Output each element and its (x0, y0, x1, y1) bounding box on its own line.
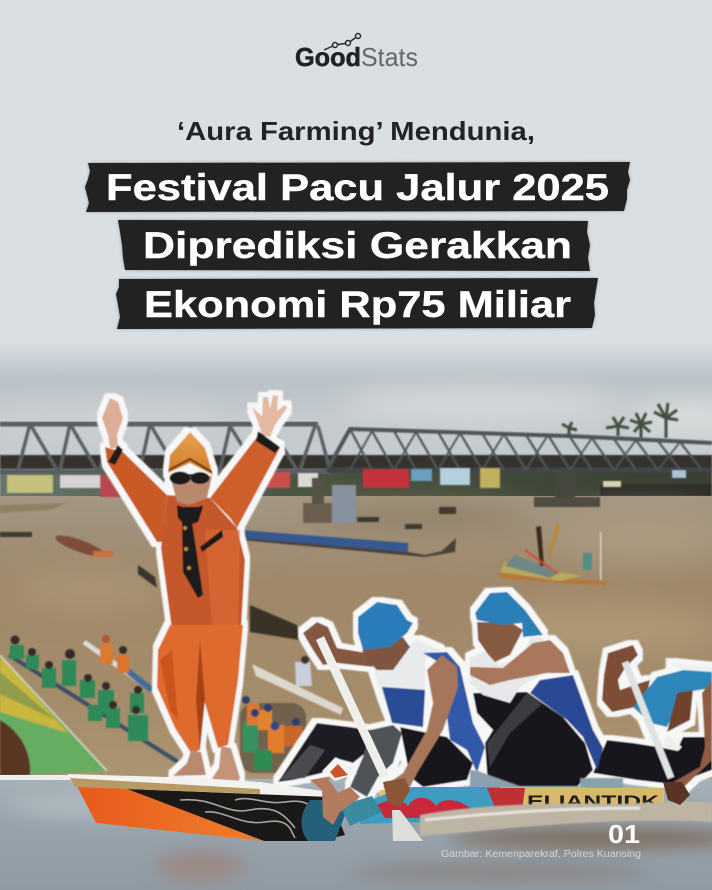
crowd on the bridge deck (0, 455, 712, 469)
feet (173, 750, 206, 776)
sticker gap with orange inset (322, 757, 357, 781)
swimmers and canoe crowd mid river (54, 531, 157, 588)
sleeve cuffs (108, 445, 123, 465)
rower foot over the hull (310, 777, 360, 825)
title line 1 (85, 162, 630, 212)
logo chart line (324, 34, 360, 50)
deck (68, 774, 330, 798)
dancing boy figure (102, 395, 287, 783)
ornate decorated boat (498, 523, 607, 586)
river colour patches (10, 505, 712, 655)
third rower hand (663, 782, 690, 805)
bridge (0, 424, 712, 472)
orange prow (76, 784, 264, 841)
canoe hull (9, 655, 178, 762)
shirt sleeves (105, 447, 167, 542)
rowers group (278, 592, 712, 797)
title line 1: Festival Pacu Jalur 2025 (106, 167, 609, 208)
logo wordmark: Good (295, 42, 361, 72)
page number: 01 (608, 819, 640, 849)
white boat with paddler (252, 656, 343, 715)
bridge piers (303, 470, 600, 523)
second rower (470, 592, 603, 787)
title line 3: Ekonomi Rp75 Miliar (144, 284, 571, 325)
sand bar (0, 503, 67, 513)
shirt placket and pocket (177, 507, 203, 598)
background sky (0, 0, 712, 500)
front paddle (320, 638, 423, 841)
logo: Stats (361, 42, 418, 72)
first rower (278, 602, 485, 797)
clouds (0, 390, 712, 434)
subtitle: ‘Aura Farming’ Mendunia, (177, 116, 535, 146)
foreground green boat bow (0, 655, 107, 776)
title line 3 (116, 278, 598, 329)
officials in orange (100, 644, 113, 664)
left truss (0, 424, 330, 472)
trousers (157, 625, 243, 753)
river (0, 496, 712, 796)
crew in orange and green (240, 696, 306, 773)
painted side panel (360, 787, 664, 824)
sunglasses (170, 472, 210, 484)
shirt buttons (183, 526, 191, 570)
water colour patches (10, 791, 712, 882)
long boat with blue rowers (241, 530, 456, 557)
right truss (327, 429, 712, 470)
palm trees (562, 403, 678, 438)
third rower (593, 645, 712, 788)
banners on the bank (7, 468, 686, 497)
far bank with trees (0, 470, 712, 497)
title line 2: Diprediksi Gerakkan (143, 225, 572, 266)
water in the foreground (0, 775, 712, 890)
crowd behind dancer (250, 605, 300, 640)
logo (295, 34, 418, 72)
title line 2 (118, 220, 590, 271)
hands (102, 398, 123, 448)
painted boat name: ELIANTIDK (527, 792, 660, 811)
small boats on the river (0, 507, 456, 537)
splash along the hull (420, 801, 712, 836)
gold trim (70, 778, 260, 794)
long boat hull (68, 757, 664, 841)
green crew boat on the left (9, 635, 178, 762)
collar (177, 505, 203, 525)
face (170, 476, 212, 505)
front rower hand (383, 778, 410, 807)
shirt body (161, 495, 245, 630)
hat (168, 432, 213, 475)
black carved hull (127, 789, 345, 841)
paddlers in green (10, 645, 148, 741)
boat deck behind rowers (470, 770, 623, 788)
image credit: Gambar: Kemenparekraf, Polres Kuansing (441, 849, 641, 860)
